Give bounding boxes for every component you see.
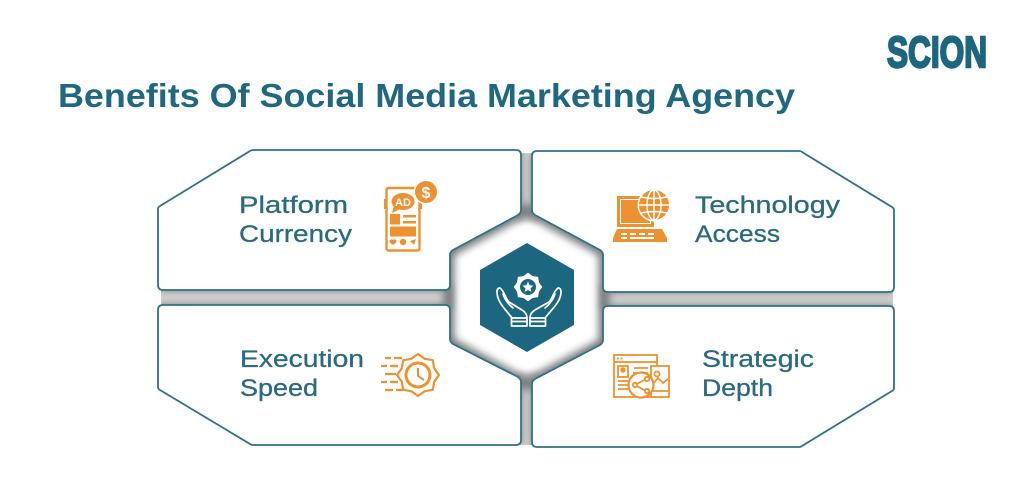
label: Technology Access [695,192,841,248]
title: Benefits Of Social Media Marketing Agency [58,77,796,114]
infographic [60,35,986,448]
panel: Execution Speed [158,305,521,445]
icon: mobile ad with dollar: AD [395,197,411,209]
icon: mobile ad with dollar [384,180,438,250]
label: Technology Access: Access [695,221,780,248]
label: Execution Speed [240,346,364,402]
icon: laptop with globe [613,188,670,242]
label: Technology Access: Technology [695,192,841,219]
label: Platform Currency [239,192,353,248]
label: Strategic Depth: Depth [702,375,773,402]
panel: Strategic Depth [532,306,894,447]
panel: Technology Access [532,151,894,292]
label: Strategic Depth: Strategic [702,346,814,373]
icon: browser and phone with share symbol [614,355,669,398]
label: Platform Currency: Platform [239,192,348,219]
label: Execution Speed: Speed [240,375,318,402]
icon: gear with star held by hands [497,273,561,326]
label: Execution Speed: Execution [240,346,364,373]
label: Strategic Depth [702,346,814,402]
central shadow backdrop [161,153,893,445]
central hexagon badge [480,243,574,352]
panel: Platform Currency [158,150,521,290]
icon: gear clock with speed lines [381,354,439,396]
logo: SCION: SCION [887,28,987,77]
icon: mobile ad with dollar: $ [422,185,431,202]
label: Platform Currency: Currency [239,221,353,248]
